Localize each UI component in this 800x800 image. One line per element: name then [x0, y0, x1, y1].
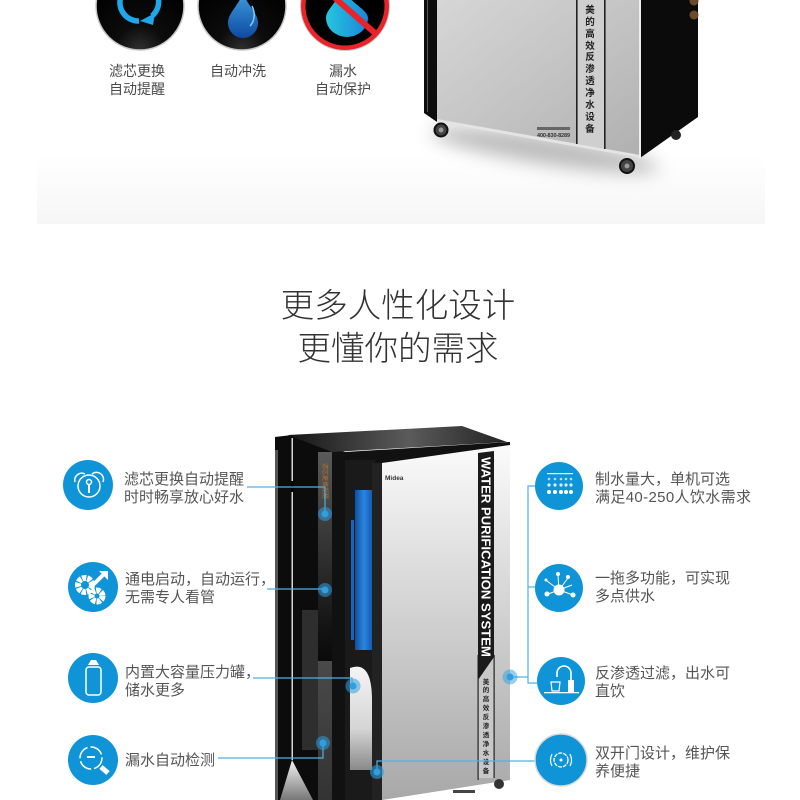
- text: direct drinking: 直饮: [595, 683, 625, 700]
- icon: gears and arrow: [68, 562, 118, 612]
- product photo: open-door machine: 反: [483, 712, 490, 721]
- label: leak protection: [315, 63, 371, 97]
- background band: product floor: [37, 155, 765, 224]
- text: filter reminder: [124, 471, 244, 506]
- product photo: top machine: 透: [585, 75, 595, 87]
- title: 更多人性化设计: [281, 288, 515, 325]
- title: 更懂你的需求: [298, 331, 498, 368]
- product photo: top machine: 净: [585, 87, 595, 99]
- text: direct drinking: [595, 665, 730, 700]
- icon: faucet and cup: [537, 657, 585, 705]
- product photo: top machine: 反: [585, 51, 595, 63]
- icon: filter replacement: [96, 0, 184, 50]
- label: auto flush: 自动冲洗: [210, 63, 266, 79]
- label: filter replacement: [109, 63, 165, 97]
- product photo: top machine: 高: [585, 28, 595, 40]
- product photo: top machine: 的: [585, 16, 595, 28]
- text: filter reminder: 时时畅享放心好水: [124, 489, 244, 506]
- product photo: open-door machine: WATER PURIFICATION SYSTEM: [478, 457, 492, 657]
- text: pressure tank: 内置大容量压力罐，: [125, 664, 260, 681]
- text: double door: [595, 745, 730, 780]
- product photo: top machine: 渗: [585, 63, 595, 75]
- label: filter replacement: 滤芯更换: [109, 63, 165, 79]
- product photo: open-door machine: 效: [483, 703, 490, 712]
- label: filter replacement: 自动提醒: [109, 81, 165, 97]
- product photo: open-door machine: 高: [483, 694, 490, 703]
- text: multi-point supply: [595, 570, 730, 605]
- icon: double door gear: [535, 734, 587, 786]
- text: auto run: 无需专人看管: [125, 589, 215, 606]
- text: water output: 制水量大，单机可选: [595, 471, 730, 488]
- text: filter reminder: 滤芯更换自动提醒: [124, 471, 244, 488]
- text: auto run: [125, 571, 275, 606]
- text: multi-point supply: 一拖多功能，可实现: [595, 570, 730, 587]
- product photo: open-door machine: 美: [483, 677, 490, 686]
- leader lines: [218, 486, 537, 772]
- icon: multi-point network: [535, 564, 583, 612]
- product photo: top machine: [424, 0, 698, 182]
- product photo: top machine: 效: [585, 40, 595, 52]
- product photo: top machine: 美: [585, 4, 595, 16]
- product photo: open-door machine: 透: [483, 730, 490, 739]
- text: double door: 养便捷: [595, 763, 640, 780]
- icon: leak detection magnifier: [68, 735, 118, 785]
- text: water output: 满足40-250人饮水需求: [595, 489, 751, 506]
- product photo: open-door machine: 备: [483, 766, 490, 775]
- label: leak protection: 漏水: [329, 63, 357, 79]
- product photo: top machine: 备: [585, 123, 595, 135]
- product photo: open-door machine: 滤芯更换提醒: [321, 463, 329, 499]
- product photo: open-door machine: [275, 426, 510, 800]
- icon: pressure tank: [68, 653, 118, 703]
- product photo: open-door machine: 设: [483, 757, 490, 766]
- text: auto run: 通电启动，自动运行，: [125, 571, 275, 588]
- text: pressure tank: [125, 664, 260, 699]
- icon: alarm clock: [63, 460, 113, 510]
- product photo: open-door machine: 渗: [483, 721, 490, 730]
- text: water output: [595, 471, 751, 506]
- hotspots: [316, 507, 518, 779]
- title: [281, 288, 515, 368]
- product photo: top machine: 水: [585, 99, 595, 111]
- product photo: top machine: 设: [585, 111, 595, 123]
- text: double door: 双开门设计，维护保: [595, 745, 730, 762]
- product photo: open-door machine: 的: [483, 685, 490, 694]
- icon: auto flush drop: [198, 0, 286, 50]
- product photo: open-door machine: 净: [483, 739, 490, 748]
- product photo: open-door machine: Midea: [385, 475, 404, 482]
- label: leak protection: 自动保护: [315, 81, 371, 97]
- product photo: top machine: 400-830-8289: [537, 133, 570, 139]
- text: pressure tank: 储水更多: [125, 682, 185, 699]
- icon: shower drops: [535, 462, 583, 510]
- product photo: open-door machine: 水: [483, 748, 490, 757]
- text: multi-point supply: 多点供水: [595, 588, 655, 605]
- text: direct drinking: 反渗透过滤，出水可: [595, 665, 730, 682]
- text: leak detection: 漏水自动检测: [125, 752, 215, 769]
- icon: leak protection: [300, 0, 390, 50]
